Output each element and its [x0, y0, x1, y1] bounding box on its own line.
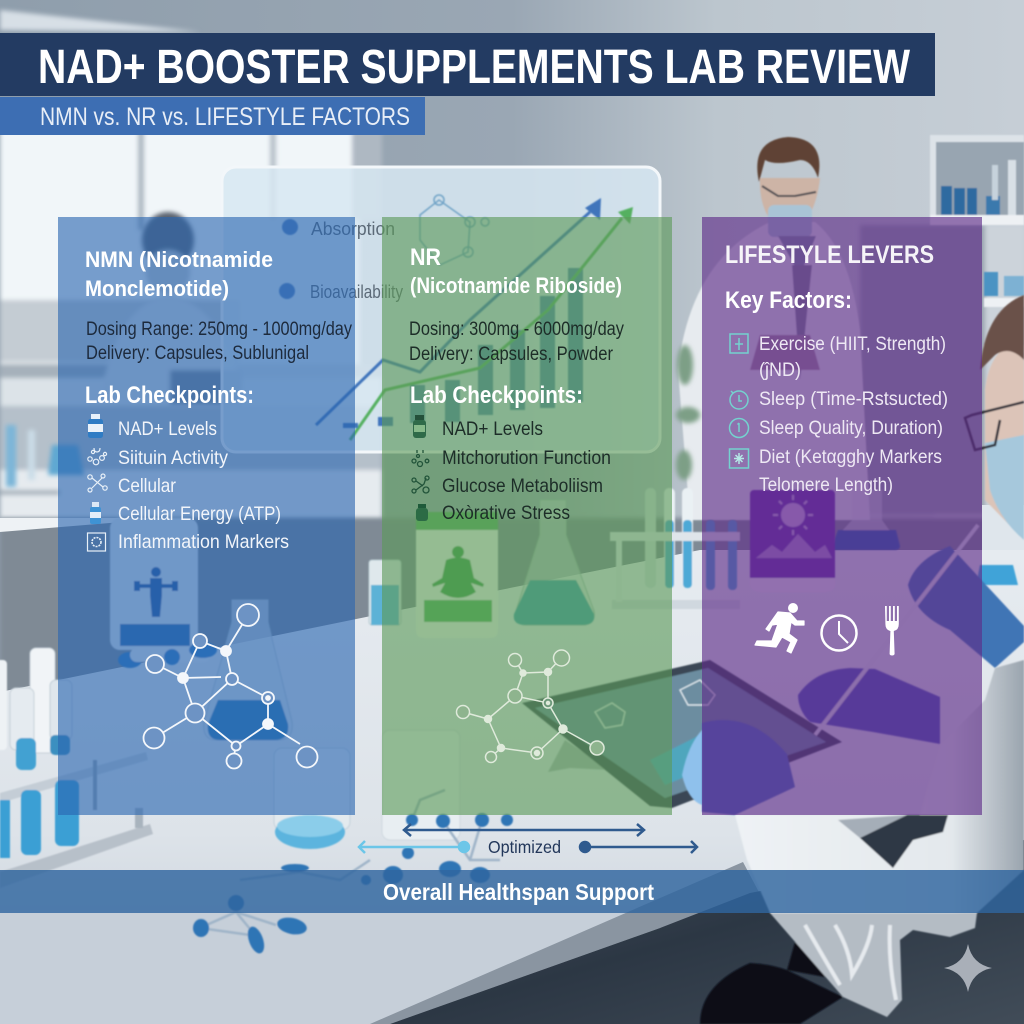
icon: dark bottle	[416, 504, 428, 521]
factor list: Telomere Length)	[759, 474, 893, 496]
arrow: left light blue	[359, 841, 469, 853]
checkpoint list: Siituin Activity	[118, 447, 228, 469]
heading: lab checkpoints: Lab Checkpoints:	[85, 382, 254, 409]
cabinet and desk	[0, 518, 1024, 700]
dosing and delivery	[409, 319, 624, 365]
checkpoint list	[88, 414, 289, 553]
molecule diagram: NR	[456, 650, 604, 762]
heading: NMN	[85, 247, 273, 301]
icon: diet box	[730, 449, 748, 468]
windows and bench backdrop	[0, 10, 1024, 535]
icon: clock	[822, 616, 856, 650]
footer band	[0, 870, 1024, 913]
icon: mitochondria dots	[412, 450, 429, 466]
subtitle banner	[0, 97, 425, 135]
checkpoint list: Oxòrative Stress	[442, 502, 570, 524]
footer band: Overall Healthspan Support	[383, 879, 654, 905]
transparent screen	[222, 167, 660, 452]
heading: lab checkpoints: Lab Checkpoints:	[410, 382, 583, 409]
plant	[676, 345, 700, 480]
spilled molecule models on table	[193, 790, 513, 956]
arrow: right navy	[580, 841, 697, 853]
supplement bottles	[110, 490, 835, 668]
checkpoint list	[412, 415, 611, 524]
icon: sparkle mark	[944, 944, 992, 992]
back figure under the blue panel	[100, 212, 245, 404]
icon: clipboard	[730, 334, 748, 353]
rear glassware left	[6, 425, 84, 487]
dosing and delivery: Dosing: 300mg - 6000mg/day	[409, 319, 624, 340]
checkpoint list: Inflammation Markers	[118, 531, 289, 553]
heading: lifestyle levers: LIFESTYLE LEVERS	[725, 241, 934, 269]
icon: fork	[885, 606, 899, 656]
icon: bottle	[413, 415, 426, 438]
checkpoint list: Cellular Energy (ATP)	[118, 503, 281, 525]
heading: NMN: Monclemotide)	[85, 276, 229, 301]
dosing and delivery: Delivery: Capsules, Powder	[409, 344, 614, 365]
heading: NR: NR	[410, 244, 441, 271]
heading: NMN: NMN (Nicotnamide	[85, 247, 273, 272]
checkpoint list: Glucose Metaboliism	[442, 475, 603, 497]
checkpoint list: Cellular	[118, 475, 176, 497]
dosing and delivery: Delivery: Capsules, Sublunigal	[86, 343, 309, 364]
shelf	[930, 135, 1024, 353]
factor list: Diet (Ketαgghy Markers	[759, 446, 942, 468]
transparent screen: Bioavailability	[310, 282, 403, 302]
heading: key factors: Key Factors:	[725, 287, 852, 314]
subtitle banner: NMN vs. NR vs. LIFESTYLE FACTORS	[40, 103, 410, 131]
gloved hands	[682, 525, 1024, 815]
transparent screen: Absorption	[311, 219, 395, 239]
factor list: Sleep (Time-Rstsucted)	[759, 388, 948, 410]
heading: NR	[410, 244, 622, 298]
dosing and delivery: Dosing Range: 250mg - 1000mg/day	[86, 319, 352, 340]
front scientist face	[965, 295, 1024, 540]
panel: NMN	[58, 217, 355, 815]
back scientist	[678, 137, 870, 520]
icon: molecule	[88, 474, 107, 492]
icon: bottle	[88, 414, 103, 438]
checkpoint list: NAD+ Levels	[442, 418, 543, 440]
icon: sirtuin dots	[88, 448, 107, 465]
icon: glucose molecule	[412, 476, 429, 493]
icon: stopwatch	[730, 391, 748, 409]
factor list	[730, 333, 948, 496]
foreground lab coat	[700, 660, 1024, 1024]
checkpoint list: NAD+ Levels	[118, 418, 217, 440]
icon: small bottle	[90, 502, 101, 524]
icon: inflammation box	[88, 533, 106, 551]
heading: NR: (Nicotnamide Riboside)	[410, 273, 622, 298]
panel: NR	[382, 217, 672, 815]
molecule diagram: NMN	[144, 604, 318, 768]
tablet	[522, 660, 842, 808]
factor list: (ĵND)	[759, 359, 801, 381]
bench glassware centre	[204, 488, 1018, 849]
factor list: Sleep Quality, Duration)	[759, 417, 943, 439]
icon: runner	[755, 603, 804, 653]
label: optimized: Optimized	[488, 837, 561, 857]
test tube rack	[0, 648, 153, 888]
factor list: Exercise (HIIT, Strength)	[759, 333, 946, 355]
panel: lifestyle levers	[702, 217, 982, 815]
icon: circle one	[730, 418, 748, 438]
dosing and delivery	[86, 319, 352, 364]
arrow: optimized range	[404, 824, 644, 836]
checkpoint list: Mitchorution Function	[442, 447, 611, 469]
